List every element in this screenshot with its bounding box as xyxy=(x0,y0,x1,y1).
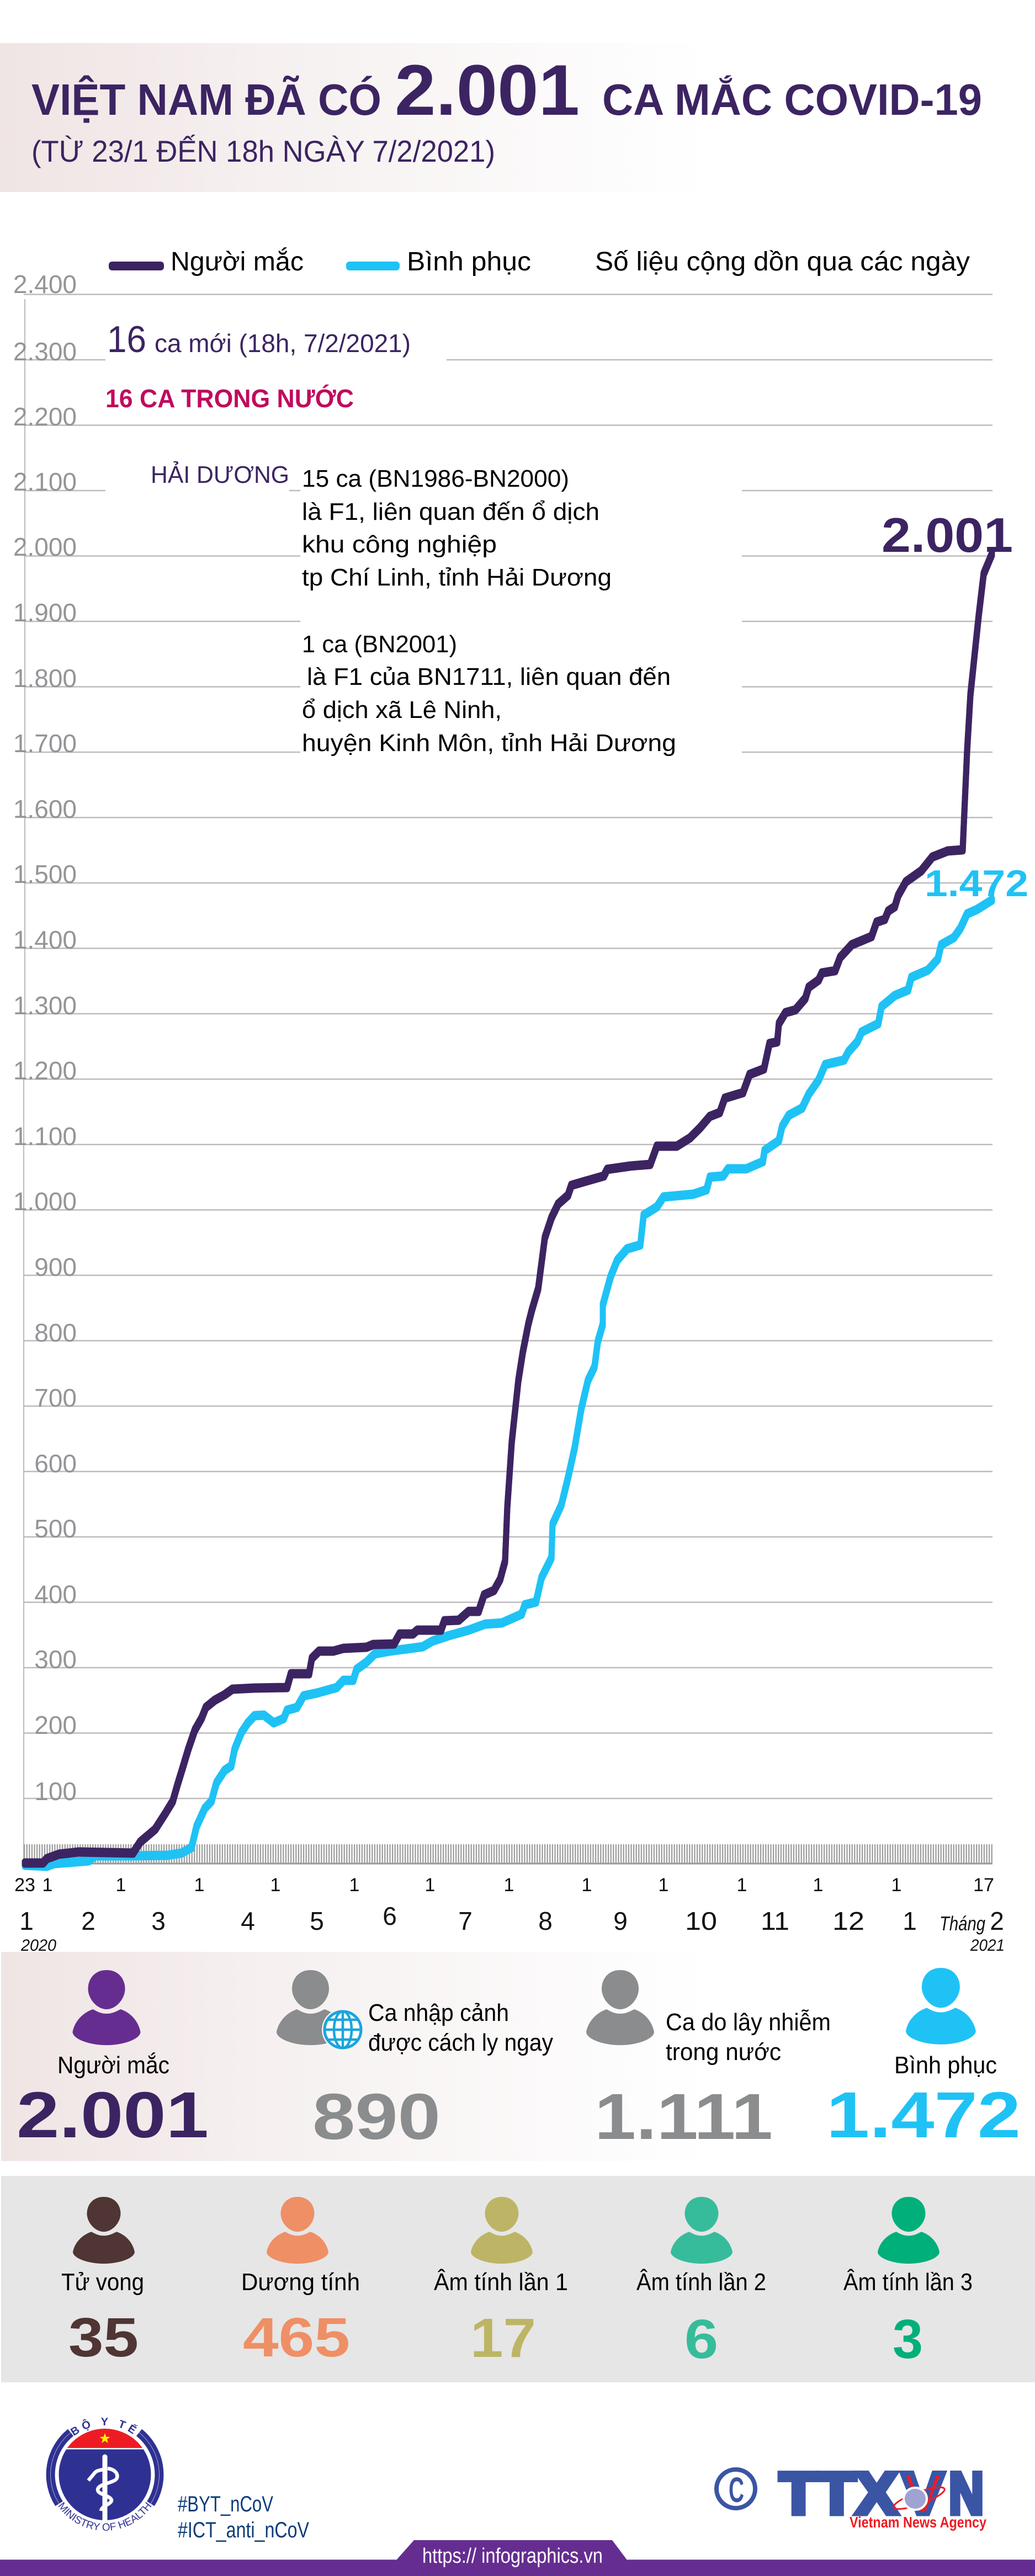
agency wordmark: Vietnam News Agency xyxy=(850,2514,986,2531)
day ticks: 17 xyxy=(973,1875,994,1896)
y axis labels: 900 xyxy=(34,1253,77,1281)
logo: Ministry of Health: BỘ Y TẾ xyxy=(70,2418,138,2436)
icon: person negative three times xyxy=(878,2197,940,2264)
recovered line xyxy=(25,898,992,1868)
icon: person negative twice xyxy=(671,2197,733,2264)
number: domestic: 1.111 xyxy=(595,2080,773,2153)
end label: cases: 2.001 xyxy=(882,508,1013,562)
label: imported: Ca nhập cảnh xyxy=(368,1999,509,2026)
note: new cases xyxy=(105,318,411,413)
y axis labels: 1.500 xyxy=(13,860,77,888)
logo: TTXVN copyright xyxy=(716,2460,986,2531)
y axis labels: 1.700 xyxy=(13,729,77,758)
y axis labels: 1.300 xyxy=(13,991,77,1020)
title: CA MẮC COVID-19 xyxy=(602,75,982,124)
month labels: 7 xyxy=(458,1907,473,1935)
day ticks: 1 xyxy=(582,1875,592,1896)
icon: person cases xyxy=(73,1970,140,2045)
title: 2.001 xyxy=(395,50,580,130)
y axis labels: 300 xyxy=(34,1645,77,1674)
title: VIỆT NAM ĐÃ CÓ xyxy=(31,75,381,124)
y axis labels: 100 xyxy=(34,1777,77,1806)
note: new cases: 16 CA TRONG NƯỚC xyxy=(105,384,354,413)
day ticks: 1 xyxy=(504,1875,514,1896)
y axis labels: 1.600 xyxy=(13,795,77,823)
label: domestic xyxy=(666,2009,831,2066)
agency wordmark: N xyxy=(949,2460,984,2526)
note: Hải Dương cases: 1 ca (BN2001) xyxy=(302,631,457,658)
number: negative three times: 3 xyxy=(893,2308,923,2370)
month labels: 10 xyxy=(685,1907,717,1935)
legend: Người mắc xyxy=(171,247,304,276)
number: cases: 2.001 xyxy=(17,2079,209,2152)
month labels: 8 xyxy=(538,1907,553,1935)
copyright mark xyxy=(716,2469,755,2510)
y axis labels: 500 xyxy=(34,1514,77,1543)
note: Hải Dương cases xyxy=(151,461,676,757)
daily tick hatch xyxy=(24,1844,992,1864)
month labels xyxy=(19,1902,1005,1955)
number: positive: 465 xyxy=(243,2307,350,2369)
month labels: 9 xyxy=(613,1907,628,1935)
y axis labels: 2.400 xyxy=(13,270,77,299)
legend: Số liệu cộng dồn qua các ngày xyxy=(595,247,970,276)
month labels: 2021 xyxy=(970,1936,1005,1955)
month labels: 1 xyxy=(903,1907,917,1935)
logo: Ministry of Health: MINISTRY OF HEALTH xyxy=(59,2502,151,2531)
label: domestic: trong nước xyxy=(666,2039,781,2066)
number: deaths: 35 xyxy=(68,2307,139,2369)
icon: person deaths xyxy=(73,2197,135,2264)
subtitle: (TỪ 23/1 ĐẾN 18h NGÀY 7/2/2021) xyxy=(31,134,495,168)
panel: patient status xyxy=(1,2176,1035,2382)
day ticks xyxy=(14,1875,994,1896)
y axis labels: 1.200 xyxy=(13,1056,77,1085)
y axis labels: 1.800 xyxy=(13,664,77,693)
note: Hải Dương cases: 15 ca (BN1986-BN2000) xyxy=(302,465,569,492)
label: positive: Dương tính xyxy=(241,2269,360,2296)
label: negative three times: Âm tính lần 3 xyxy=(843,2269,973,2296)
hashtags: #BYT_nCoV xyxy=(178,2492,273,2516)
y axis labels: 800 xyxy=(34,1318,77,1347)
icon: person negative once xyxy=(471,2197,533,2264)
legend: Bình phục xyxy=(407,247,531,276)
note: Hải Dương cases: HẢI DƯƠNG xyxy=(151,461,289,488)
end label: recovered: 1.472 xyxy=(925,863,1028,904)
label: domestic: Ca do lây nhiễm xyxy=(666,2009,831,2036)
day ticks: 1 xyxy=(737,1875,747,1896)
label: deaths: Tử vong xyxy=(61,2269,144,2296)
month labels: 6 xyxy=(383,1902,397,1930)
footer band xyxy=(0,2540,1035,2576)
y axis labels: 1.000 xyxy=(13,1187,77,1216)
day ticks: 1 xyxy=(116,1875,126,1896)
title xyxy=(31,50,982,130)
header panel xyxy=(0,43,982,192)
month labels: 2020 xyxy=(20,1936,56,1955)
agency wordmark xyxy=(779,2460,986,2531)
hashtags xyxy=(178,2492,309,2542)
y axis labels xyxy=(13,270,77,1806)
day ticks: 1 xyxy=(891,1875,901,1896)
month labels: 4 xyxy=(241,1907,255,1935)
panel: totals xyxy=(1,1952,1021,2161)
day ticks: 23 xyxy=(14,1875,35,1896)
icon: person domestic xyxy=(586,1970,654,2045)
label: cases: Người mắc xyxy=(57,2052,169,2079)
note: new cases: 16 xyxy=(107,318,146,360)
note: Hải Dương cases: là F1 của BN1711, liên quan đến xyxy=(307,663,671,690)
note: Hải Dương cases: là F1, liên quan đến ổ dịch xyxy=(302,498,599,525)
number: negative twice: 6 xyxy=(684,2308,718,2370)
month labels: 3 xyxy=(151,1907,166,1935)
y axis labels: 200 xyxy=(34,1711,77,1739)
day ticks: 1 xyxy=(813,1875,823,1896)
day ticks: 1 xyxy=(425,1875,435,1896)
label: imported xyxy=(368,1999,553,2056)
label: imported: được cách ly ngay xyxy=(368,2029,553,2056)
number: imported: 890 xyxy=(312,2080,440,2153)
number: negative once: 17 xyxy=(470,2307,536,2369)
month labels: 12 xyxy=(832,1907,864,1935)
month labels: 2 xyxy=(990,1907,1004,1935)
note: Hải Dương cases: tp Chí Linh, tỉnh Hải Dương xyxy=(302,564,612,591)
note: new cases: ca mới (18h, 7/2/2021) xyxy=(155,329,411,358)
hashtags: #ICT_anti_nCoV xyxy=(178,2518,309,2542)
y axis labels: 1.100 xyxy=(13,1122,77,1151)
y axis labels: 2.200 xyxy=(13,402,77,431)
y axis labels: 2.100 xyxy=(13,467,77,496)
month labels: 1 xyxy=(19,1907,34,1935)
y axis labels: 1.400 xyxy=(13,925,77,954)
y axis labels: 400 xyxy=(34,1580,77,1609)
cases line xyxy=(25,552,992,1865)
month labels: 11 xyxy=(761,1907,789,1935)
note: Hải Dương cases: khu công nghiệp xyxy=(302,531,497,558)
icon: person positive xyxy=(267,2197,328,2264)
line chart xyxy=(13,270,1028,1955)
day ticks: 1 xyxy=(659,1875,668,1896)
month labels: 2 xyxy=(81,1907,95,1935)
number: recovered: 1.472 xyxy=(826,2079,1021,2152)
agency wordmark: V xyxy=(902,2460,944,2526)
day ticks: 1 xyxy=(43,1875,52,1896)
logo: Ministry of Health xyxy=(46,2418,163,2531)
y axis labels: 2.000 xyxy=(13,533,77,561)
legend xyxy=(109,247,970,276)
label: negative once: Âm tính lần 1 xyxy=(434,2269,568,2296)
note: Hải Dương cases: huyện Kinh Môn, tỉnh Hải Dương xyxy=(302,730,676,757)
icon: globe xyxy=(322,2009,364,2051)
agency wordmark: TTX xyxy=(779,2460,898,2526)
day ticks: 1 xyxy=(349,1875,359,1896)
icon: person imported xyxy=(277,1970,344,2045)
y axis labels: 1.900 xyxy=(13,598,77,627)
day ticks: 1 xyxy=(270,1875,280,1896)
copyright mark: C xyxy=(729,2470,744,2510)
icon: person recovered xyxy=(906,1968,976,2045)
footer band: https:// infographics.vn xyxy=(422,2545,603,2568)
y axis labels: 700 xyxy=(34,1383,77,1412)
y axis labels: 600 xyxy=(34,1449,77,1478)
y axis labels: 2.300 xyxy=(13,337,77,366)
day ticks: 1 xyxy=(194,1875,204,1896)
note: Hải Dương cases: ổ dịch xã Lê Ninh, xyxy=(302,696,502,723)
month labels: Tháng xyxy=(940,1912,985,1935)
month labels: 5 xyxy=(310,1907,324,1935)
label: recovered: Bình phục xyxy=(894,2052,997,2079)
label: negative twice: Âm tính lần 2 xyxy=(636,2269,766,2296)
